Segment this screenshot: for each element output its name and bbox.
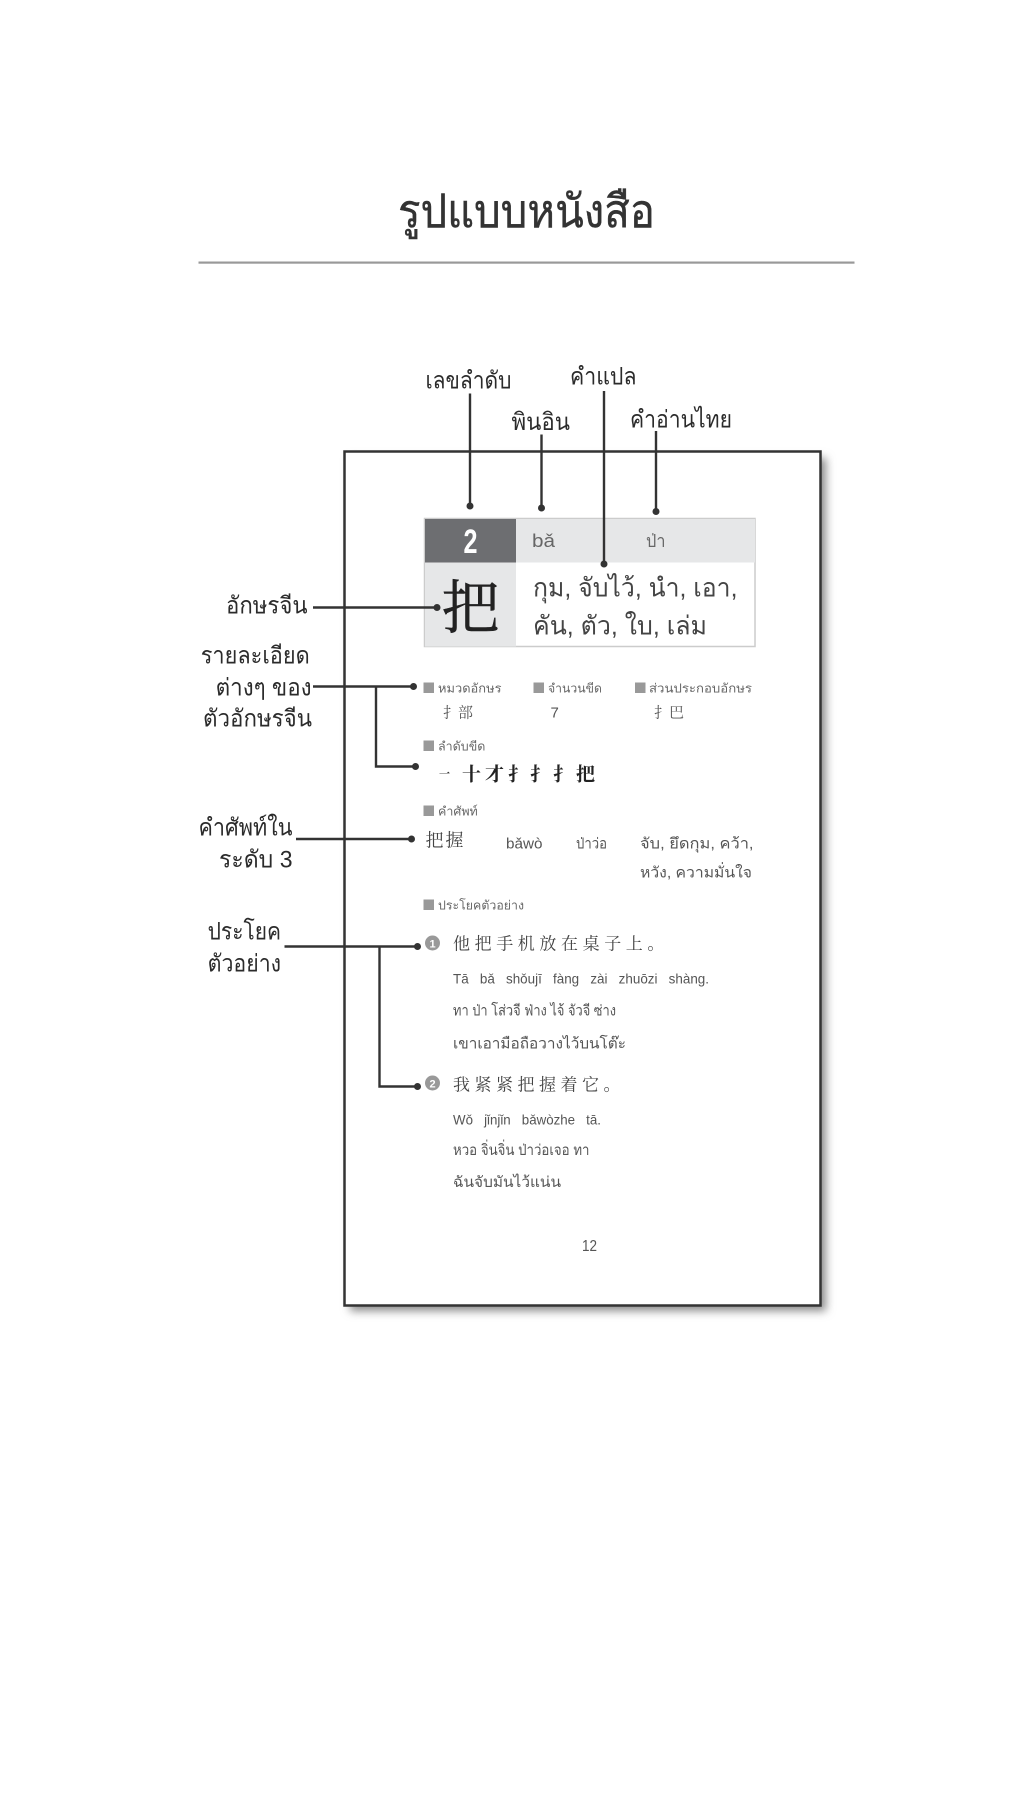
label: character details: รายละเอียด — [201, 642, 310, 670]
translation: คัน, ตัว, ใบ, เล่ม — [533, 610, 707, 640]
section: vocabulary: bǎwò — [506, 836, 542, 852]
thai reading: ป่า — [646, 531, 666, 551]
label: sequence number — [426, 368, 512, 510]
example sentence 2: ฉันจับมันไว้แน่น — [453, 1173, 561, 1191]
section: stroke order: ลำดับขีด — [438, 740, 485, 754]
label: example sentences: ตัวอย่าง — [208, 950, 281, 978]
label: level 3 vocabulary: คำศัพท์ใน — [198, 814, 292, 842]
label: chinese character — [226, 592, 440, 620]
section: character details: ส่วนประกอบอักษร — [649, 682, 752, 696]
label: level 3 vocabulary — [198, 814, 415, 874]
pinyin: bǎ — [532, 531, 556, 551]
title: รูปแบบหนังสือ — [398, 185, 655, 239]
section: example sentences heading: ประโยคตัวอย่าง — [438, 898, 524, 912]
example sentence 1: ทา ป่า โส่วจี ฟ่าง ไจ้ จัวจี ซ่าง — [453, 1002, 616, 1020]
title rule — [198, 262, 854, 264]
example sentence 1: 1 — [429, 938, 436, 950]
section: vocabulary: หวัง, ความมั่นใจ — [640, 862, 752, 882]
label: translation — [570, 364, 636, 568]
label: sequence number: เลขลำดับ — [426, 368, 512, 394]
example sentence 1: เขาเอามือถือวางไว้บนโต๊ะ — [453, 1034, 626, 1052]
example sentence 2: 我紧紧把握着它。 — [453, 1074, 625, 1094]
section: vocabulary: จับ, ยึดกุม, คว้า, — [640, 836, 754, 854]
section: character details: จำนวนขีด — [548, 682, 602, 696]
label: thai reading: คำอ่านไทย — [630, 406, 732, 434]
example sentence 2: Wǒ jǐnjǐn bǎwòzhe tā. — [453, 1112, 601, 1128]
label: level 3 vocabulary: ระดับ 3 — [219, 846, 292, 874]
label: example sentences: ประโยค — [208, 918, 281, 946]
label: translation: คำแปล — [570, 364, 636, 390]
label: character details — [201, 642, 419, 770]
label: pinyin: พินอิน — [512, 409, 570, 436]
example sentence 2 — [425, 1074, 625, 1191]
panel: entry header table — [424, 518, 755, 646]
section: character details: 扌巴 — [654, 704, 684, 722]
label: example sentences — [208, 918, 421, 1090]
section: stroke order: 一 — [439, 768, 450, 780]
section: character details: 7 — [550, 704, 559, 722]
section: character details — [424, 682, 752, 722]
label: character details: ต่างๆ ของ — [216, 674, 312, 702]
example sentence 1: Tā bǎ shǒujī fàng zài zhuōzi shàng. — [453, 970, 709, 986]
label: character details: ตัวอักษรจีน — [203, 706, 312, 732]
translation: กุม, จับไว้, นำ, เอา, — [533, 572, 738, 604]
section: vocabulary — [424, 804, 754, 882]
example sentence 1 — [425, 934, 709, 1052]
label: pinyin — [512, 409, 570, 512]
panel: sample book page — [344, 452, 826, 1311]
section: vocabulary: ป่าว่อ — [576, 836, 607, 852]
example sentence 2: 2 — [429, 1078, 436, 1090]
entry number: 2 — [464, 523, 478, 561]
section: stroke order — [424, 740, 595, 786]
section: vocabulary: 把握 — [426, 830, 466, 850]
chinese character: 把 — [441, 576, 500, 641]
section: vocabulary: คำศัพท์ — [438, 804, 478, 818]
section: character details: 扌部 — [443, 704, 473, 722]
section: character details: หมวดอักษร — [438, 682, 502, 696]
translation — [533, 572, 738, 640]
page number: 12 — [582, 1238, 597, 1255]
example sentence 1: 他把手机放在桌子上。 — [453, 934, 669, 954]
example sentence 2: หวอ จิ่นจิ่น ป่าว่อเจอ ทา — [453, 1139, 590, 1159]
label: chinese character: อักษรจีน — [226, 592, 308, 620]
label: thai reading — [630, 406, 732, 515]
section: stroke order: 十才扌扌扌把 — [462, 764, 595, 786]
